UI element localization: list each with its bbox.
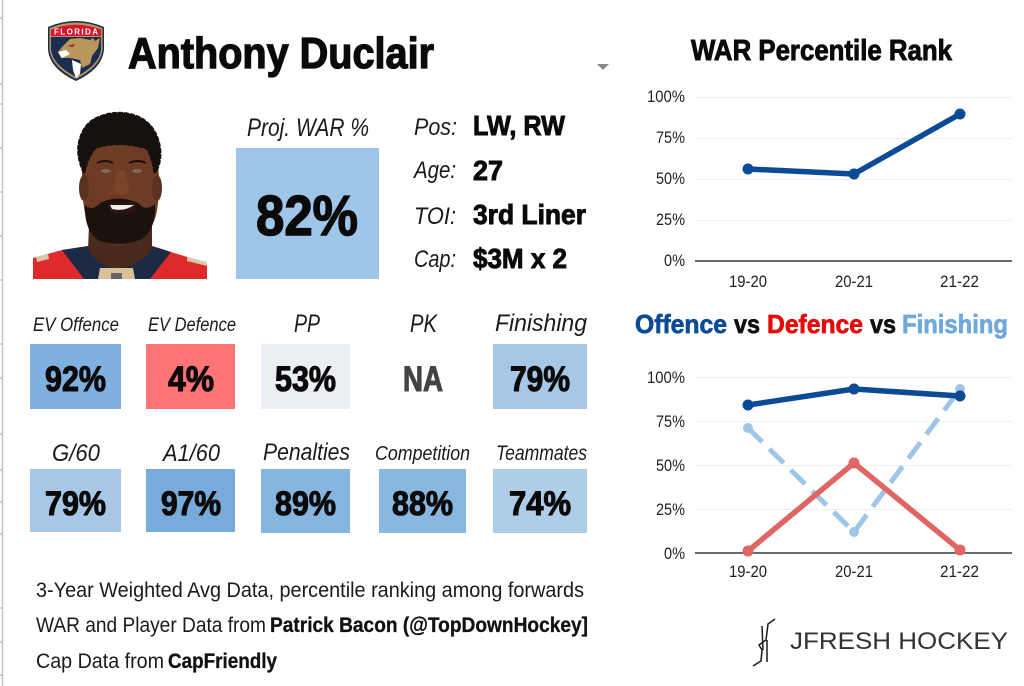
panel: metric tiles row two: Teammates	[496, 442, 587, 465]
line chart: offence defence finishing: 25%	[656, 500, 685, 519]
panel: projected WAR: Proj. WAR %	[247, 114, 369, 142]
text block: data notes: 3-Year Weighted Avg Data, percentile ranking among forwards	[36, 579, 584, 602]
panel: metric tiles row one: 79%	[510, 360, 570, 399]
heading: offence vs defence vs finishing: vs	[734, 309, 760, 339]
logo: JFresh Hockey: JFRESH HOCKEY	[790, 628, 1008, 655]
panel: metric tiles row one: EV Defence	[148, 315, 236, 336]
line chart: offence defence finishing: 20-21	[835, 562, 873, 581]
panel: player bio: Cap:	[414, 246, 456, 273]
panel: metric tiles row one: 53%	[275, 360, 336, 399]
panel: metric tiles row two: 74%	[509, 485, 571, 523]
icon: Florida Panthers shield logo	[48, 21, 104, 81]
heading: offence vs defence vs finishing	[635, 309, 1008, 339]
panel: metric tiles row one: 4%	[168, 360, 214, 399]
panel: player bio: $3M x 2	[473, 243, 567, 274]
panel: metric tiles row one: NA	[403, 360, 443, 399]
panel: metric tiles row one: PP	[294, 310, 320, 338]
text block: data notes	[36, 579, 588, 673]
heading: offence vs defence vs finishing: vs	[870, 309, 896, 339]
panel: metric tiles row one: Finishing	[495, 310, 588, 337]
panel: metric tiles row two	[30, 439, 587, 533]
line chart: WAR percentile rank: 0%	[664, 251, 685, 270]
title: player name: Anthony Duclair	[128, 29, 434, 78]
panel: player bio: 3rd Liner	[473, 199, 586, 230]
text block: data notes: CapFriendly	[168, 650, 277, 673]
line chart: WAR percentile rank: 20-21	[835, 272, 873, 291]
panel: metric tiles row one	[30, 310, 588, 409]
line chart: WAR percentile rank: 100%	[647, 87, 685, 106]
line chart: offence defence finishing: 100%	[647, 368, 685, 387]
line chart: offence defence finishing: 19-20	[729, 562, 767, 581]
line chart: offence defence finishing: 75%	[656, 412, 685, 431]
panel: player bio: 27	[473, 155, 503, 186]
line chart: WAR percentile rank: 25%	[656, 210, 685, 229]
panel: player bio: Pos:	[414, 114, 457, 141]
text block: data notes: WAR and Player Data from	[36, 614, 266, 637]
panel: player bio: TOI:	[414, 203, 456, 230]
panel: metric tiles row two: Competition	[375, 443, 470, 465]
player photo	[33, 113, 207, 279]
panel: metric tiles row one: PK	[410, 310, 438, 338]
panel: metric tiles row one: 92%	[45, 360, 106, 399]
text block: data notes: Patrick Bacon (@TopDownHockey]	[270, 614, 588, 637]
panel: projected WAR	[236, 114, 379, 279]
line chart: offence defence finishing: 21-22	[940, 562, 979, 581]
line chart: WAR percentile rank: 75%	[656, 128, 685, 147]
line chart: offence defence finishing: 50%	[656, 456, 685, 475]
line chart: WAR percentile rank: 19-20	[729, 272, 767, 291]
panel: metric tiles row two: 97%	[161, 485, 221, 523]
line chart: offence defence finishing	[647, 368, 1012, 581]
panel: player bio: Age:	[412, 157, 456, 184]
panel: metric tiles row two: 88%	[392, 485, 453, 523]
heading: offence vs defence vs finishing: Finishing	[902, 309, 1008, 339]
line chart: WAR percentile rank: 50%	[656, 169, 685, 188]
icon: Florida Panthers shield logo: FLORIDA	[54, 28, 98, 36]
panel: metric tiles row two: G/60	[52, 440, 101, 467]
icon: dropdown arrow	[597, 64, 609, 70]
panel: player bio: LW, RW	[473, 110, 566, 141]
panel: metric tiles row two: 89%	[275, 485, 336, 523]
text block: data notes: Cap Data from	[36, 650, 164, 673]
heading: offence vs defence vs finishing: Offence	[635, 309, 727, 339]
panel: metric tiles row one: EV Offence	[33, 315, 119, 336]
line chart: WAR percentile rank: 21-22	[940, 272, 979, 291]
panel: metric tiles row two: Penalties	[263, 439, 350, 466]
heading: WAR percentile rank: WAR Percentile Rank	[691, 35, 953, 67]
panel: metric tiles row two: 79%	[45, 485, 106, 523]
panel: player bio	[412, 110, 586, 274]
line chart: WAR percentile rank	[647, 87, 1012, 291]
panel: projected WAR: 82%	[256, 184, 358, 248]
line chart: offence defence finishing: 0%	[664, 544, 685, 563]
panel: metric tiles row two: A1/60	[161, 440, 221, 467]
logo: JFresh Hockey	[753, 619, 1008, 666]
heading: offence vs defence vs finishing: Defence	[767, 309, 863, 339]
